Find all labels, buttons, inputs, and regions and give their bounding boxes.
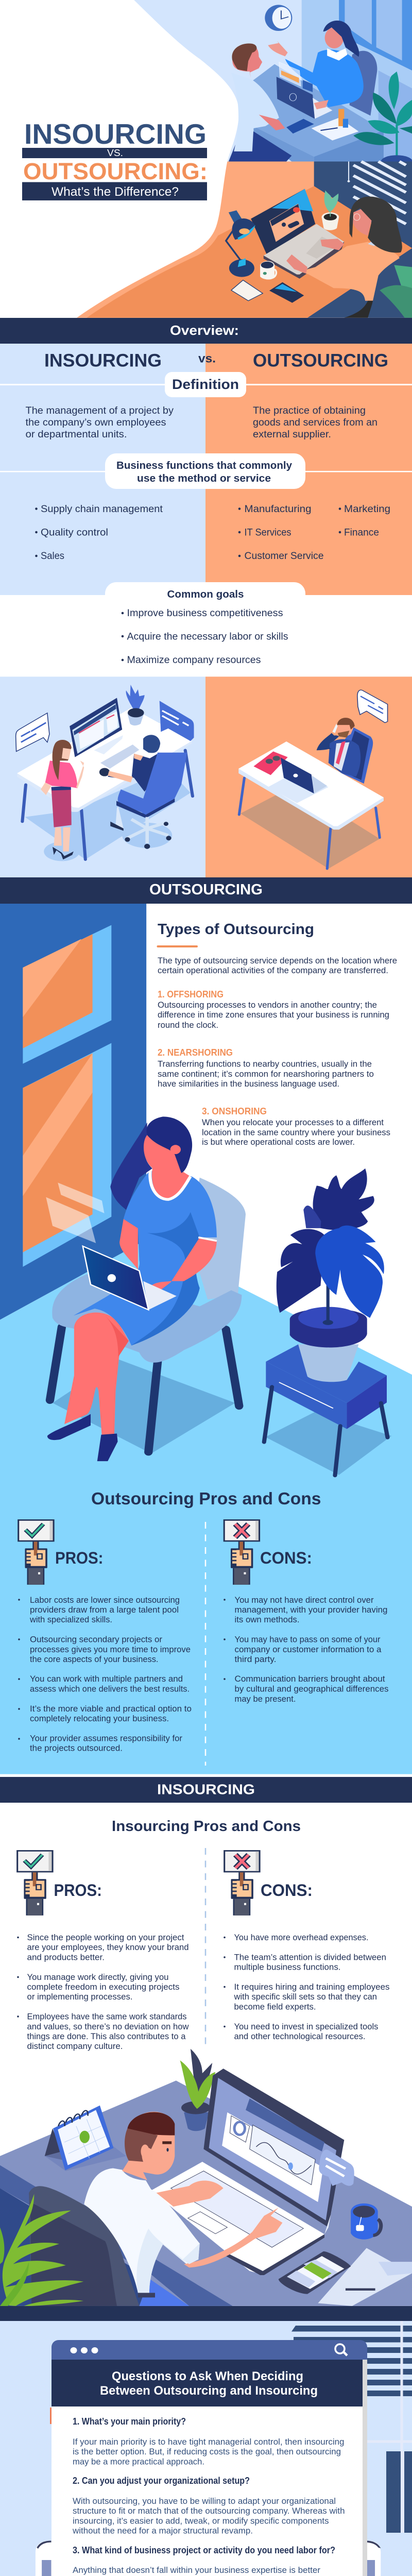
types of outsourcing heading: Types of Outsourcing — [158, 921, 314, 938]
common goals: Improve business competitiveness — [127, 608, 283, 619]
type 2: nearshoring: Transferring functions to nearby countries, usually in the — [158, 1059, 372, 1069]
outsourcing pros list: with specialized skills. — [29, 1615, 112, 1624]
business functions pill: use the method or service — [137, 473, 271, 484]
outsourcing pros list: processes gives you more time to improve — [30, 1645, 191, 1654]
definition pill — [165, 372, 246, 397]
outsourcing pros list: providers draw from a large talent pool — [30, 1605, 179, 1615]
window body — [52, 2360, 363, 2576]
type 2: nearshoring: same continent; it’s common for nearshoring partners to — [158, 1069, 374, 1079]
hero illustration: insourcing meeting — [134, 0, 412, 168]
panel: outsourcing column background — [205, 344, 412, 595]
insourcing pros list: Since the people working on your project — [27, 1933, 184, 1942]
insourcing pros list: complete freedom in executing projects — [27, 1982, 179, 1992]
insourcing definition — [26, 405, 174, 440]
type 1: offshoring: difference in time zone ensures that your business is running — [158, 1010, 389, 1020]
insourcing banner — [0, 1777, 412, 1803]
laptop frame holding the questions window — [4, 2540, 409, 2576]
insourcing pros list: and values, so there’s no deviation on how — [27, 2022, 189, 2031]
question 1: is the better option. But, if reducing costs is the goal, then outsourcing — [73, 2447, 341, 2456]
business functions pill — [105, 453, 305, 489]
hero title: VS. — [107, 148, 123, 158]
insourcing pros list: Employees have the same work standards — [27, 2011, 186, 2022]
insourcing cons list: You need to invest in specialized tools — [234, 2022, 378, 2031]
insourcing pros list: things are done. This also contributes to a — [27, 2031, 186, 2041]
insourcing cons list: multiple business functions. — [234, 1962, 341, 1972]
common goals: Maximize company resources — [127, 655, 261, 666]
type 3: onshoring — [202, 1106, 390, 1147]
question 2: With outsourcing, you have to be willing to adapt your organizational — [73, 2496, 336, 2506]
outsourcing cons list: management, with your provider having — [235, 1605, 387, 1615]
types intro text: certain operational activities of the company are transferred. — [158, 965, 388, 975]
definition pill: Definition — [172, 377, 239, 392]
outsourcing pros list — [18, 1595, 192, 1753]
column heading: outsourcing: OUTSOURCING — [253, 350, 388, 371]
background: questions section — [0, 2321, 412, 2576]
common goals: Common goals — [167, 589, 244, 600]
outsourcing cons list: You may not have direct control over — [235, 1595, 374, 1605]
type 1: offshoring: round the clock. — [158, 1020, 218, 1030]
icon: insourcing pros sign — [18, 1851, 53, 1916]
business functions pill: Business functions that commonly — [116, 460, 293, 471]
outsourcing banner — [0, 877, 412, 904]
insourcing pros list: or implementing processes. — [27, 1992, 133, 2002]
type 3: onshoring: location in the same country where your business — [202, 1127, 390, 1138]
outsourcing cons list: Communication barriers brought about — [235, 1674, 385, 1684]
insourcing cons list: You have more overhead expenses. — [234, 1933, 369, 1942]
window heading: Between Outsourcing and Insourcing — [100, 2384, 318, 2398]
type 1: offshoring — [158, 989, 389, 1030]
type 3: onshoring: is but where operational costs are lower. — [202, 1137, 355, 1147]
window heading: Questions to Ask When Deciding — [112, 2369, 303, 2383]
outsourcing pros list: It’s the more viable and practical option to — [30, 1704, 192, 1714]
question 1: If your main priority is to have tight managerial control, then insourcing — [73, 2437, 344, 2447]
illustration: man working on laptop — [0, 2049, 412, 2306]
window title bar — [52, 2340, 367, 2360]
outsourcing pros list: assess which one delivers the best results. — [30, 1684, 190, 1694]
type 3: onshoring: 3. ONSHORING — [202, 1106, 267, 1116]
outsourcing pros list: completely relocating your business. — [30, 1714, 169, 1723]
outsourcing cons list: its own methods. — [235, 1615, 300, 1624]
outsourcing functions list: Finance — [344, 528, 379, 538]
outsourcing pros list: Your provider assumes responsibility for — [30, 1733, 182, 1743]
overview banner — [0, 318, 412, 344]
hero title: OUTSOURCING: — [23, 158, 208, 184]
question 2: structure to fit or match that of the outsourcing company. Whereas with — [73, 2506, 345, 2516]
insourcing pros list: distinct company culture. — [27, 2041, 123, 2051]
overview banner: Overview: — [170, 323, 239, 338]
insourcing cons list: and other technological resources. — [234, 2031, 366, 2041]
question 1: 1. What’s your main priority? — [73, 2416, 186, 2427]
icon: pros sign — [19, 1520, 54, 1585]
insourcing cons list: with specific skill sets so that they can — [234, 1992, 377, 2002]
insourcing definition: The management of a project by — [26, 405, 174, 416]
type 2: nearshoring: have similarities in the business language used. — [158, 1079, 339, 1089]
type 1: offshoring: Outsourcing processes to vendors in another country; the — [158, 1000, 377, 1010]
outsourcing banner: OUTSOURCING — [149, 882, 263, 898]
insourcing pros list: You manage work directly, giving you — [27, 1972, 169, 1982]
outsourcing pros list: You can work with multiple partners and — [30, 1674, 183, 1684]
insourcing functions list: Sales — [41, 551, 64, 562]
hero illustration: outsourcing desk — [77, 161, 412, 318]
panel: insourcing column background — [0, 344, 205, 595]
outsourcing definition — [253, 405, 377, 440]
pros label: PROS: — [55, 1549, 103, 1567]
insourcing functions list: Quality control — [41, 528, 108, 538]
insourcing functions list — [35, 504, 163, 562]
window controls — [70, 2347, 98, 2353]
column heading: insourcing: INSOURCING — [44, 350, 162, 371]
icon: search — [335, 2344, 347, 2355]
type 3: onshoring: When you relocate your processes to a different — [202, 1117, 384, 1127]
cons label: CONS: — [260, 1549, 312, 1567]
insourcing cons list: become field experts. — [234, 2002, 316, 2011]
question 3: 3. What kind of business project or activity do you need labor for? — [73, 2545, 335, 2555]
icon: cons sign — [224, 1520, 260, 1585]
types intro text — [158, 956, 397, 975]
insourcing banner: INSOURCING — [157, 1782, 255, 1797]
outsourcing functions list: Marketing — [344, 504, 390, 515]
outsourcing cons list: You may have to pass on some of your — [235, 1634, 381, 1645]
outsourcing definition: external supplier. — [253, 429, 331, 440]
icon: insourcing cons sign — [225, 1851, 260, 1916]
insourcing pros and cons heading: Insourcing Pros and Cons — [112, 1818, 301, 1835]
types intro text: The type of outsourcing service depends on the location where — [158, 956, 397, 965]
question 1 — [73, 2416, 344, 2467]
types of outsourcing heading — [157, 921, 314, 947]
insourcing definition: or departmental units. — [26, 429, 127, 440]
insourcing functions list: Supply chain management — [41, 504, 163, 515]
outsourcing definition: goods and services from an — [253, 417, 377, 428]
insourcing cons list — [224, 1933, 389, 2041]
hero title — [22, 118, 208, 200]
panel: insourcing office illustration — [0, 676, 205, 877]
common goals — [0, 582, 412, 676]
question 3 — [73, 2545, 335, 2576]
question 2: without the need for a major structural revamp. — [72, 2526, 253, 2536]
question 3: Anything that doesn’t fall within your business expertise is better — [73, 2565, 320, 2575]
outsourcing functions list: Customer Service — [244, 551, 323, 562]
question 1: may be a more practical approach. — [73, 2456, 204, 2467]
room illustration: woman with laptop by the window — [0, 904, 412, 1774]
panel: outsourcing office illustration — [205, 676, 412, 877]
outsourcing pros list: the core aspects of your business. — [30, 1654, 159, 1664]
outsourcing cons list — [224, 1595, 388, 1704]
type 2: nearshoring: 2. NEARSHORING — [158, 1047, 233, 1058]
insourcing definition: the company’s own employees — [26, 417, 166, 428]
insourcing pros label: PROS: — [54, 1881, 102, 1900]
outsourcing cons list: company or customer information to a — [235, 1645, 382, 1654]
insourcing pros list: are your employees, they know your brand — [27, 1942, 188, 1952]
insourcing cons list: The team’s attention is divided between — [234, 1953, 386, 1962]
insourcing cons label: CONS: — [261, 1881, 313, 1900]
common goals: Acquire the necessary labor or skills — [127, 632, 288, 642]
outsourcing cons list: may be present. — [235, 1694, 296, 1704]
outsourcing pros list: Outsourcing secondary projects or — [30, 1634, 162, 1645]
insourcing cons list: It requires hiring and training employees — [234, 1982, 389, 1992]
hero title: What’s the Difference? — [52, 185, 179, 199]
question 2: 2. Can you adjust your organizational setup? — [73, 2476, 250, 2486]
window heading — [52, 2360, 363, 2406]
type 1: offshoring: 1. OFFSHORING — [158, 989, 224, 999]
outsourcing definition: The practice of obtaining — [253, 405, 366, 416]
outsourcing functions list: Manufacturing — [244, 504, 311, 515]
outsourcing functions list: IT Services — [244, 528, 291, 538]
outsourcing pros and cons heading: Outsourcing Pros and Cons — [91, 1489, 321, 1508]
hero title: INSOURCING — [24, 118, 207, 150]
type 2: nearshoring — [158, 1047, 374, 1089]
outsourcing pros list: the projects outsourced. — [30, 1743, 123, 1753]
insourcing pros list: and products better. — [27, 1953, 105, 1962]
insourcing pros list — [17, 1933, 189, 2051]
outsourcing cons list: by cultural and geographical differences — [235, 1684, 388, 1694]
questions window — [50, 2340, 367, 2576]
question 2 — [72, 2476, 345, 2536]
question 2: insourcing, it’s easier to add, tweak, or modify specific components — [73, 2516, 329, 2526]
divider band under illustration — [0, 2306, 412, 2321]
outsourcing cons list: third party. — [235, 1654, 276, 1664]
vs label: vs. — [198, 351, 216, 365]
outsourcing functions list — [238, 504, 390, 562]
outsourcing pros list: Labor costs are lower since outsourcing — [30, 1595, 180, 1605]
